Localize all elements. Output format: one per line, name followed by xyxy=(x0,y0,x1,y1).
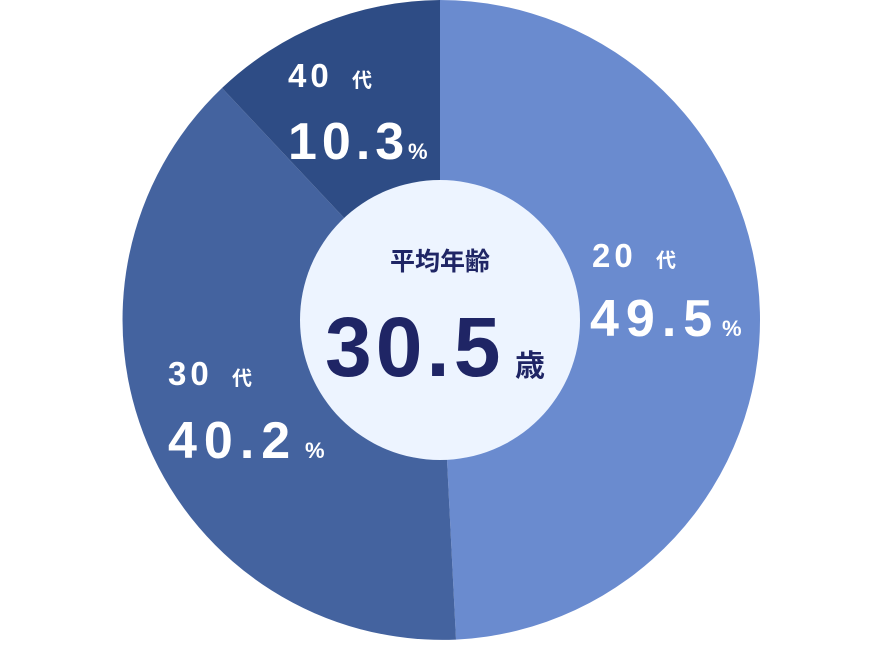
label: 40代: 40 xyxy=(288,57,333,94)
center label: average age: 30.5 xyxy=(325,300,504,394)
label: 40代: 代 xyxy=(352,70,372,92)
label: 20代: 49.5 xyxy=(590,290,719,348)
slice: 20代 xyxy=(440,0,760,640)
center circle xyxy=(300,180,580,460)
label: 20代: 20 xyxy=(592,237,637,274)
label: 30代 xyxy=(168,355,325,470)
center label: average age xyxy=(325,248,545,394)
label: 20代: 代 xyxy=(656,250,676,272)
label: 30代: 40.2 xyxy=(168,412,297,470)
center label: average age: 平均年齢 xyxy=(390,248,490,276)
slice: 30代 xyxy=(123,88,456,640)
label: 30代: % xyxy=(305,438,325,463)
slice: 40代 xyxy=(222,0,440,320)
label: 20代 xyxy=(590,237,742,348)
label: 40代: 10.3 xyxy=(288,113,409,171)
label: 30代: 代 xyxy=(232,368,252,390)
label: 20代: % xyxy=(722,316,742,341)
label: 30代: 30 xyxy=(168,355,213,392)
label: 40代 xyxy=(288,57,428,171)
label: 40代: % xyxy=(408,139,428,164)
center label: average age: 歳 xyxy=(515,350,545,383)
